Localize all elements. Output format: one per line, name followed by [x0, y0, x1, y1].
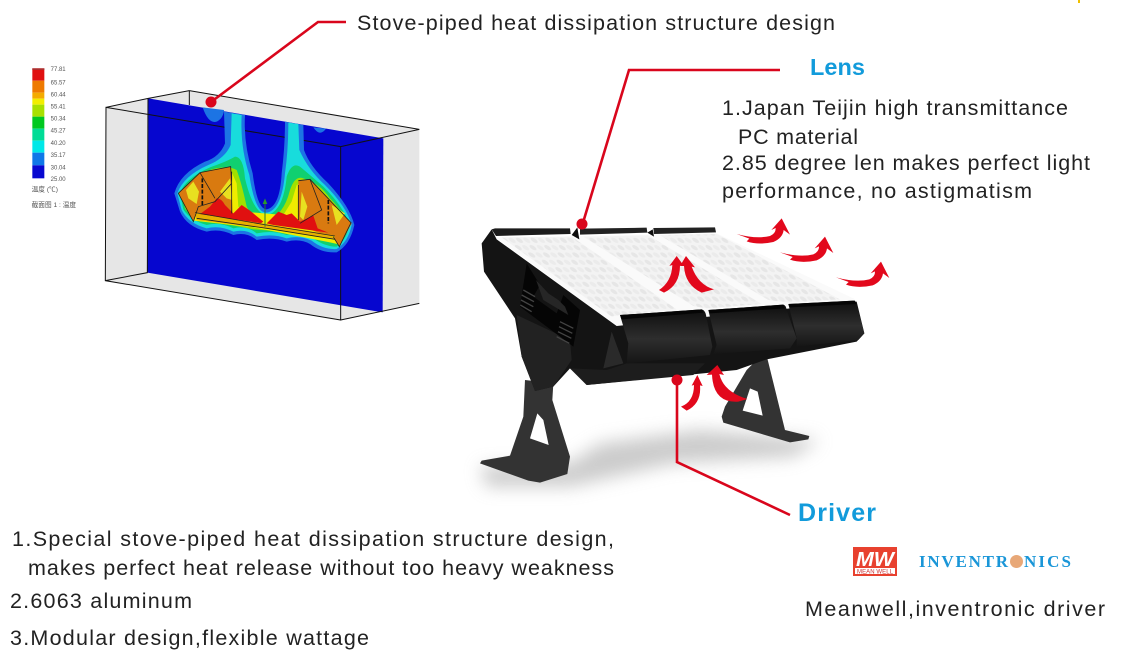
simulation box [105, 91, 419, 320]
lamp body [482, 229, 864, 391]
heading: driver: Driver [798, 499, 876, 527]
text block: lens features: performance, no astigmatism [722, 179, 1032, 203]
logo: Inventronics: INVENTR [919, 552, 1009, 571]
left leg [480, 380, 570, 483]
right leg [722, 358, 809, 442]
temperature legend: 40.20 [51, 141, 66, 147]
temperature legend: 45.27 [51, 128, 66, 134]
callout line: driver [672, 374, 790, 515]
text block: heat dissipation features: 3.Modular design,flexible wattage [10, 626, 369, 650]
logo: Mean Well [853, 547, 897, 576]
driver housings [620, 301, 864, 363]
LED panels [496, 233, 855, 325]
corner tick [1078, 0, 1080, 3]
heat plume contours [174, 107, 354, 252]
top lens bars [492, 227, 716, 239]
temperature legend [32, 67, 76, 209]
logo: Mean Well: MW [856, 549, 896, 571]
text block: lens features: PC material [738, 125, 858, 149]
text block: lens features [722, 96, 1090, 203]
temperature legend: 温度 (℃) [32, 185, 58, 194]
temperature legend: 25.00 [51, 177, 66, 183]
text block: heat dissipation features: makes perfect heat release without too heavy weakness [28, 556, 614, 580]
temperature legend: 50.34 [51, 116, 66, 122]
temperature legend: 77.81 [51, 67, 66, 73]
logo: Mean Well: MEAN WELL [857, 570, 894, 576]
text block: heat dissipation features [10, 527, 614, 650]
airflow arrows [659, 218, 889, 411]
text block: heat dissipation features: 2.6063 aluminum [10, 589, 192, 613]
callout line: stove-piped structure [206, 22, 346, 108]
temperature legend: 55.41 [51, 104, 66, 110]
caption: driver brands: Meanwell,inventronic driver [805, 597, 1105, 621]
temperature legend: 30.04 [51, 165, 66, 171]
temperature legend: 35.17 [51, 153, 66, 159]
logo: Inventronics [919, 552, 1071, 571]
temperature legend: 65.57 [51, 80, 66, 86]
temperature legend: 截面图 1 : 温度 [32, 200, 76, 209]
heading: stove-piped design: Stove-piped heat dissipation structure design [357, 11, 835, 35]
logo: Inventronics: NICS [1024, 552, 1071, 571]
ground shadow [480, 430, 820, 487]
heading: lens: Lens [810, 54, 865, 80]
text block: lens features: 1.Japan Teijin high transmittance [722, 96, 1068, 120]
text block: lens features: 2.85 degree len makes perfect light [722, 151, 1090, 175]
heat simulation diagram [32, 67, 419, 320]
temperature legend: 60.44 [51, 92, 66, 98]
text block: heat dissipation features: 1.Special stove-piped heat dissipation structure design, [12, 527, 614, 551]
lamp product illustration [480, 218, 889, 487]
callout line: lens [576, 70, 780, 230]
